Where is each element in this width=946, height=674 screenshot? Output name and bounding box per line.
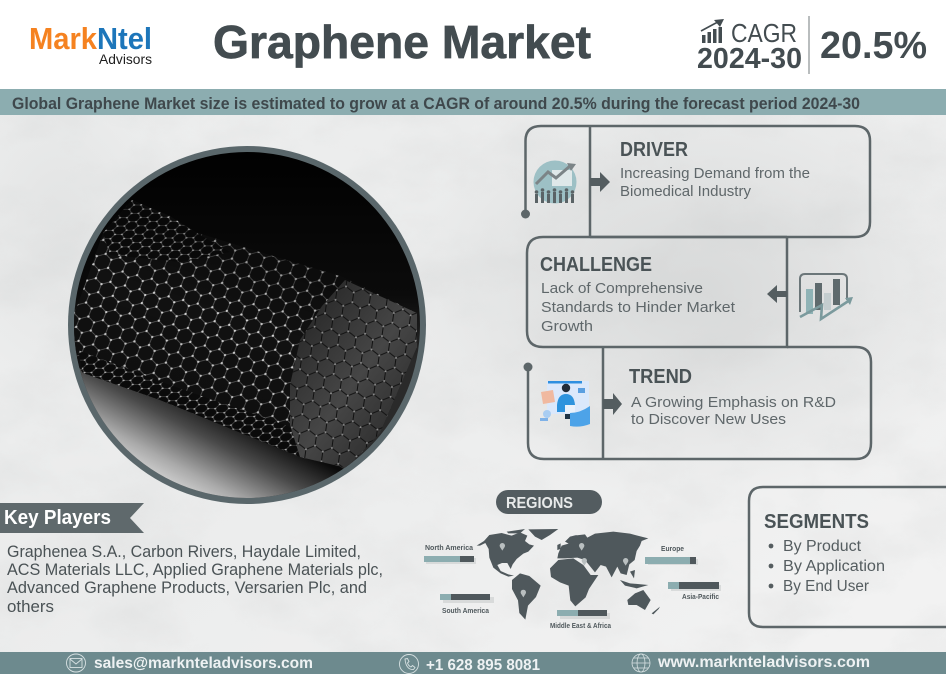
trend heading: TREND (629, 366, 692, 388)
segments list (769, 538, 885, 595)
subtitle banner: Global Graphene Market size is estimated to grow at a CAGR of around 20.5% during the forecast period 2024-30 (12, 95, 860, 113)
driver text (620, 165, 810, 200)
panel: segments (749, 487, 946, 627)
icon: phone (400, 654, 418, 674)
logo: MarkNtel Advisors: MarkNtel (29, 21, 152, 56)
key players list: Graphenea S.A., Carbon Rivers, Haydale Limited, (7, 542, 361, 561)
panel: trend (524, 347, 871, 459)
floor gradient (80, 368, 344, 498)
website: www.marknteladvisors.com (657, 654, 870, 671)
region: Middle East and Africa (550, 610, 611, 630)
tube open end (290, 280, 417, 468)
arrow: driver (590, 172, 610, 192)
phone number: +1 628 895 8081 (426, 657, 540, 674)
region: Asia-Pacific (668, 582, 721, 601)
arrow: challenge (767, 285, 787, 303)
arrow: trend (603, 393, 622, 415)
region: Europe: Europe (661, 546, 684, 553)
driver heading: DRIVER (620, 139, 688, 161)
region: South America (440, 594, 494, 615)
segments heading: SEGMENTS (764, 511, 869, 533)
key players list: ACS Materials LLC, Applied Graphene Materials plc, (7, 560, 383, 579)
region: Asia-Pacific: Asia-Pacific (682, 594, 719, 601)
CAGR value: 20.5% (820, 25, 927, 67)
logo: MarkNtel Advisors: Advisors (99, 51, 152, 67)
icon: bar chart with zigzag arrow (800, 274, 853, 319)
challenge text: Growth (541, 318, 593, 335)
tube body mesh (60, 200, 417, 468)
challenge heading: CHALLENGE (540, 254, 652, 276)
icon: rising bars with arrow (701, 19, 724, 43)
regions pill (496, 490, 602, 514)
region: North America (424, 545, 476, 564)
email address: sales@marknteladvisors.com (94, 655, 313, 672)
region: Middle East and Africa: Middle East & Africa (550, 623, 611, 630)
key players list (7, 542, 383, 616)
driver text: Increasing Demand from the (620, 165, 810, 182)
panel: challenge (527, 237, 853, 347)
key players ribbon: Key Players (4, 507, 111, 529)
CAGR label: CAGR (731, 18, 797, 48)
key players list: Advanced Graphene Products, Versarien Plc, and (7, 578, 367, 597)
panel: driver (521, 126, 870, 237)
title: Graphene Market (213, 16, 591, 68)
footer bar (0, 652, 946, 674)
challenge text (541, 280, 736, 335)
region: North America: North America (425, 545, 473, 552)
regions pill: REGIONS (506, 495, 573, 512)
icon: growth chart with people (534, 160, 576, 204)
CAGR period: 2024-30 (697, 43, 802, 75)
icon: email (66, 654, 86, 672)
challenge text: Standards to Hinder Market (541, 299, 736, 316)
trend text: A Growing Emphasis on R&D (631, 394, 836, 411)
driver text: Biomedical Industry (620, 183, 751, 200)
region: South America: South America (442, 608, 489, 615)
key players list: others (7, 597, 54, 616)
icon: analyst with dashboards (540, 381, 590, 427)
segments list: By Product (783, 538, 862, 555)
graphene tube photo in circle (60, 140, 440, 510)
icon: globe (632, 654, 650, 672)
challenge text: Lack of Comprehensive (541, 280, 703, 297)
segments list: By End User (783, 578, 869, 595)
header band (0, 0, 946, 89)
segments list: By Application (783, 558, 885, 575)
region: Europe (645, 546, 698, 565)
trend text: to Discover New Uses (631, 411, 786, 428)
subtitle banner (0, 89, 946, 115)
key players ribbon (0, 503, 144, 533)
world map (477, 529, 660, 620)
trend text (631, 394, 836, 428)
